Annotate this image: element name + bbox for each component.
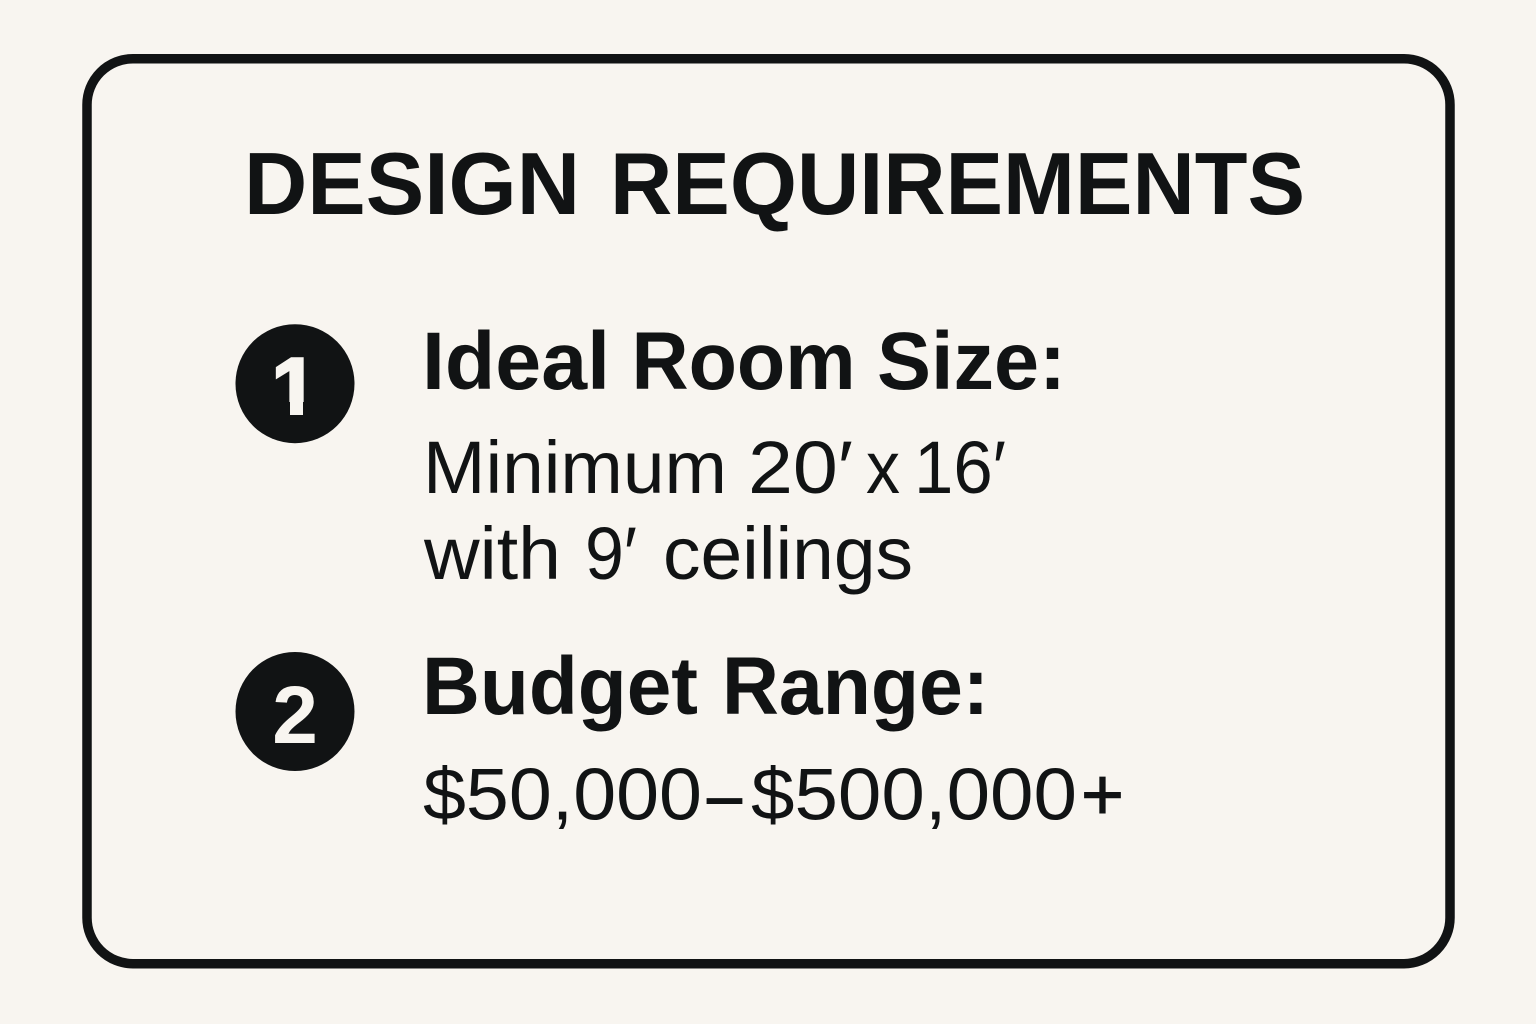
- item 1 title: [422, 316, 1066, 407]
- item 2 description: $500,000: [751, 754, 1077, 836]
- item 1 description: ceilings: [663, 512, 913, 595]
- item 2 title: Budget: [422, 641, 698, 732]
- icon: number 1 badge: [236, 324, 354, 443]
- item 1 description: 20′: [748, 426, 853, 509]
- icon: number 1 badge: 1: [272, 342, 317, 433]
- item 2 description: +: [1081, 754, 1124, 836]
- item 2: budget range: [236, 641, 1124, 836]
- panel: design requirements card: [87, 59, 1450, 964]
- item 2 title: [422, 641, 989, 732]
- icon: number 2 badge: 2: [272, 670, 318, 761]
- heading: design requirements: [244, 134, 1305, 233]
- item 1 title: Ideal: [422, 316, 610, 407]
- item 1 description: 16′: [914, 426, 1006, 509]
- item 1 description: x: [866, 426, 900, 509]
- item 1 description: 9′: [585, 512, 637, 595]
- heading: design requirements: REQUIREMENTS: [610, 134, 1305, 233]
- heading: design requirements: DESIGN: [244, 134, 580, 233]
- item 1 title: Size:: [877, 316, 1066, 407]
- item 1 description: with: [423, 512, 561, 595]
- item 1: ideal room size: [236, 316, 1066, 595]
- item 1 title: Room: [632, 316, 856, 407]
- item 1 description: [423, 426, 1006, 595]
- item 2 description: –: [707, 754, 742, 836]
- icon: number 2 badge: [236, 652, 354, 771]
- item 2 title: Range:: [722, 641, 989, 732]
- item 2 description: $50,000: [423, 754, 702, 836]
- item 1 description: Minimum: [423, 426, 727, 509]
- item 2 description: [423, 754, 1124, 836]
